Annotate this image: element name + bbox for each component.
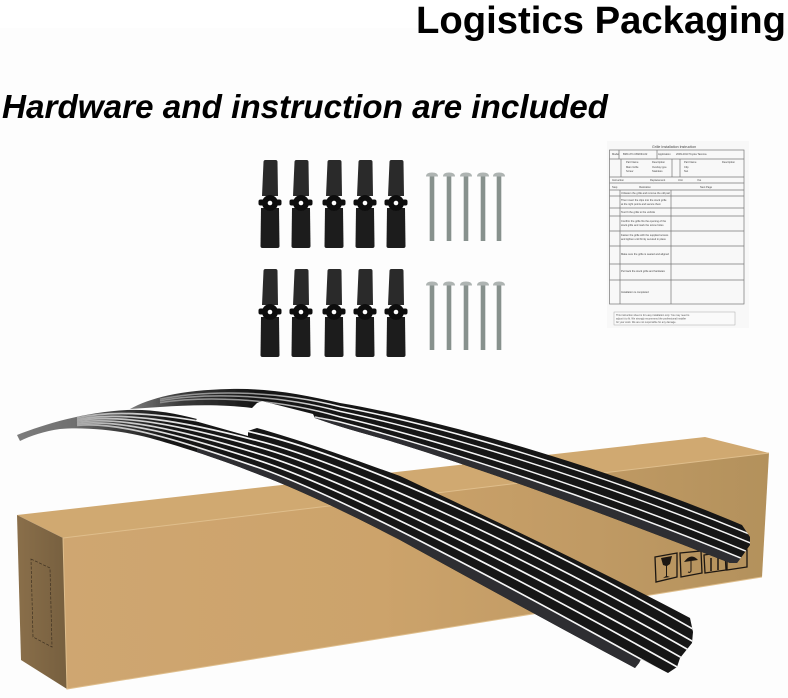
sheet text rows: Put back the stock grille and hardware	[621, 269, 666, 273]
sheet text rows: Step	[612, 185, 618, 189]
hardware: black mounting clips	[258, 160, 408, 357]
sheet text rows: Instruction	[612, 178, 625, 182]
grille: back rails	[130, 388, 750, 563]
handling icon: arrows up	[704, 552, 726, 573]
sheet text rows: Make sure the grille is seated and aligned	[621, 252, 669, 256]
sheet text rows: Next Page	[700, 185, 713, 189]
sheet note box: for your work. We are not responsible for any damage.	[616, 321, 677, 324]
sheet text rows: Screw	[626, 169, 633, 173]
sheet note box	[614, 312, 735, 325]
sheet title: Grille Installation Instruction	[652, 145, 696, 149]
sheet text rows: Part Name	[626, 160, 639, 164]
sheet text rows: stock grille and mark the screw holes	[621, 223, 664, 227]
front rail details	[77, 413, 695, 698]
sheet text rows: Fasten the grille with the supplied screws	[621, 233, 669, 237]
heading: hardware and instruction: Hardware and instruction are included	[2, 88, 609, 125]
handling icon: box partially hidden	[727, 550, 747, 570]
hardware: screws	[426, 172, 505, 350]
back rail body	[130, 389, 750, 563]
sheet text rows: Illustration	[639, 185, 651, 189]
title: Logistics Packaging	[416, 0, 786, 42]
sheet text rows: Unit	[678, 178, 683, 182]
sheet text rows: Installation is completed	[621, 290, 649, 294]
box side face	[17, 515, 67, 689]
box top face	[17, 437, 769, 538]
box front face	[63, 453, 769, 689]
sheet text rows: Overlay type	[652, 165, 667, 169]
sheet text rows: Main Grille	[626, 165, 639, 169]
sheet note box: adjust it to fit. We strongly recommend the professional installer	[616, 318, 686, 320]
sheet table	[610, 150, 744, 304]
sheet text rows: Test fit the grille to the vehicle	[621, 210, 656, 214]
back rail details	[160, 392, 750, 563]
sheet text rows: Description	[722, 160, 736, 164]
sheet text rows: at the right points and secure them	[621, 202, 661, 206]
sheet text rows: Stainless	[652, 169, 663, 173]
sheet text rows: Description	[652, 160, 666, 164]
sheet text rows: BMC-PO-CB2034-02	[623, 152, 648, 156]
sheet text rows: Application	[658, 152, 671, 156]
sheet text rows: Nut	[684, 169, 688, 173]
sheet text rows: Model	[612, 152, 619, 156]
sheet text rows: Then insert the clips into the stock grille	[621, 198, 667, 202]
sheet note box: This instruction sheet is for easy installation only. You may need to	[616, 314, 690, 317]
handling icon: umbrella	[680, 551, 702, 577]
instruction sheet	[607, 141, 749, 328]
sheet text rows: Confirm the grille fits the opening of the	[621, 219, 667, 223]
side label outline	[31, 559, 52, 647]
sheet text rows	[612, 152, 736, 294]
sheet text rows: Yes	[697, 178, 702, 182]
cardboard box	[17, 437, 769, 689]
sheet text rows: 2009-2013 Toyota Tacoma	[676, 152, 707, 156]
grille: front rails	[17, 410, 695, 698]
sheet text rows: Clip	[684, 165, 689, 169]
sheet text rows: Unfasten the grille and remove the old part	[621, 191, 670, 195]
sheet text rows: Replacement	[650, 178, 666, 182]
front rail body	[17, 410, 693, 673]
handling icon: fragile	[655, 553, 677, 582]
sheet text rows: Part Name	[684, 160, 697, 164]
sheet text rows: and tighten until firmly secured in place	[621, 237, 666, 241]
